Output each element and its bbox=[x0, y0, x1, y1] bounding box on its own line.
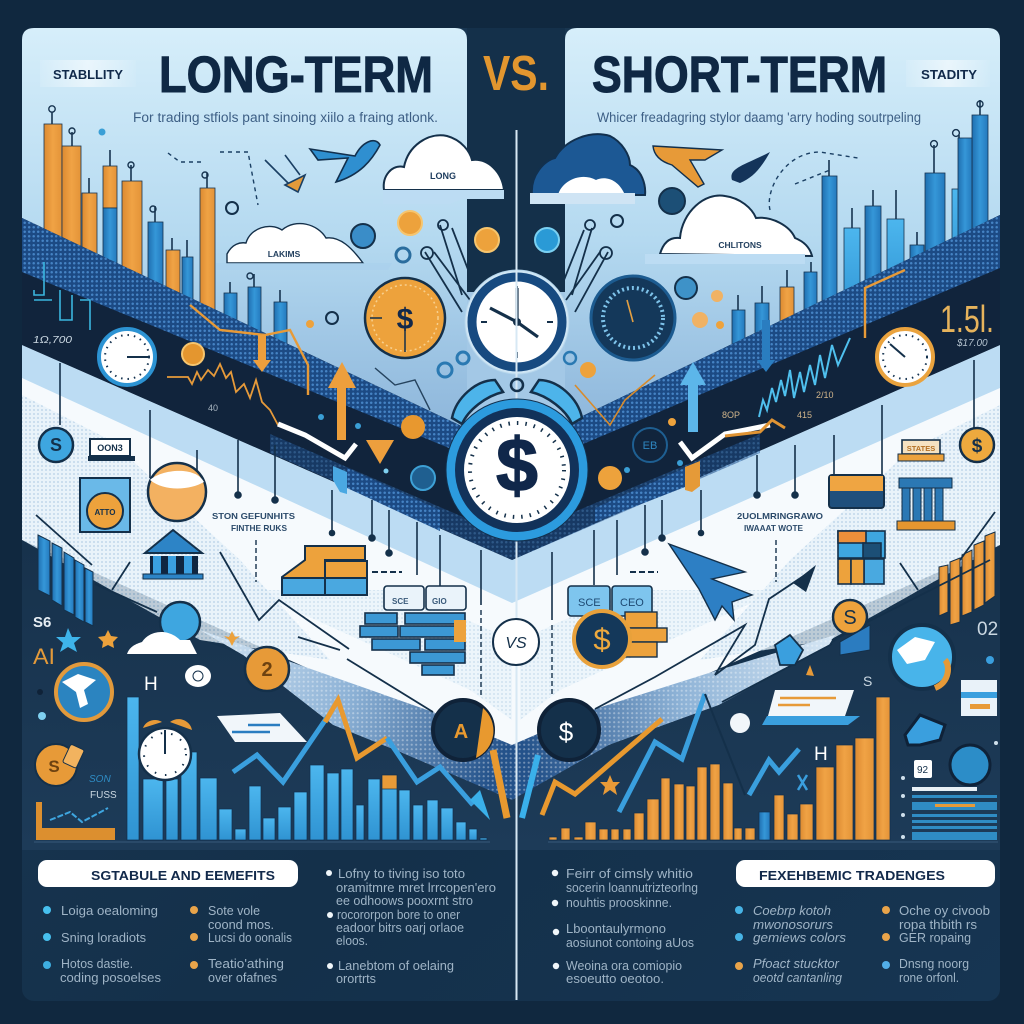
bullets column four: Feirr of cimsly whitio bbox=[566, 866, 693, 881]
icon: dollar coin gauge bbox=[365, 278, 445, 358]
pale halftone band left bbox=[22, 395, 330, 660]
chart: long-term candlesticks bbox=[44, 106, 287, 357]
bullets column four: aosiunot contoing aUos bbox=[566, 935, 694, 950]
icon: right pillars bbox=[897, 478, 955, 530]
label: right band numbers bbox=[722, 390, 834, 420]
text: right middle: IWAAAT WOTE bbox=[744, 523, 803, 533]
icon: blue stacks: GIO bbox=[432, 597, 447, 606]
panel: lower dark left bbox=[22, 540, 512, 850]
pale halftone centre left bbox=[250, 590, 512, 720]
halftone band right bbox=[512, 215, 1000, 474]
trend: left dark lines bbox=[95, 552, 433, 712]
subtitle left: For trading stfiols pant sinoing xiilo a fraing atlonk. bbox=[133, 110, 438, 125]
icon: left sign bbox=[88, 439, 135, 461]
icon: shield bbox=[775, 635, 803, 665]
bullets column five: Coebrp kotoh bbox=[753, 903, 831, 918]
icon: right coin bbox=[960, 428, 994, 462]
icon: VS badge bbox=[493, 619, 539, 665]
pale halftone band right bbox=[700, 405, 1000, 660]
text: left middle: STON GEFUNHITS bbox=[212, 511, 295, 521]
bullets column five bbox=[735, 903, 847, 985]
icon: right card bbox=[829, 475, 884, 508]
icon: left dollar circle bbox=[39, 428, 73, 462]
icon: right magnifier bbox=[522, 700, 599, 818]
icon: hat bbox=[905, 715, 945, 745]
bullets column six bbox=[882, 903, 990, 985]
bullets column two: coond mos. bbox=[208, 917, 274, 932]
label: son fuss: SON bbox=[89, 774, 111, 785]
bullets column two: Sote vole bbox=[208, 903, 260, 918]
bullets column one: Loiga oealoming bbox=[61, 903, 158, 918]
tag: stability right bbox=[906, 60, 990, 87]
bullets column three: Lofny to tiving iso toto bbox=[338, 866, 465, 881]
bullets column five: oeotd cantanling bbox=[753, 970, 843, 985]
bullets column two bbox=[190, 903, 292, 985]
icon: top clock bbox=[465, 270, 569, 374]
chart: right stacked rows bbox=[912, 787, 997, 840]
icon: orange plane bbox=[653, 146, 722, 187]
text: left middle bbox=[212, 511, 295, 533]
chart: right slanted bars bbox=[939, 532, 995, 625]
icon: box stack bbox=[282, 546, 367, 595]
bullets column two: Teatio'athing bbox=[208, 956, 284, 971]
icon: cloud lakims bbox=[216, 224, 392, 270]
tag: stability left: STABLLITY bbox=[53, 68, 124, 82]
halftone strip lower right bright bbox=[595, 468, 685, 522]
bullets column four: Weoina ora comiopio bbox=[566, 958, 682, 973]
label: right band numbers: 8OP bbox=[722, 410, 740, 420]
halftone ribbon lower left bbox=[200, 630, 512, 800]
hooks right bbox=[562, 220, 612, 312]
dollar coin bbox=[574, 611, 630, 667]
icon: target bbox=[185, 665, 211, 687]
bullets column six: rone orfonl. bbox=[899, 970, 959, 985]
icon: orange bag bbox=[35, 744, 84, 786]
halftone strip lower left bbox=[270, 434, 512, 560]
icon: orange coin low bbox=[245, 647, 289, 691]
icon: right swoosh bbox=[731, 152, 770, 183]
bullets column six: ropa thbith rs bbox=[899, 917, 978, 932]
icon: VS badge: VS bbox=[505, 635, 527, 652]
line chart vines left bbox=[375, 368, 430, 410]
chart: long-term bars bbox=[127, 697, 487, 840]
icon: left dollar circle: S bbox=[50, 435, 62, 455]
icon: paper plane bbox=[669, 544, 752, 620]
title: versus: VS. bbox=[483, 47, 549, 101]
icon: piggy bbox=[950, 745, 990, 785]
icon: coin stack dollar bbox=[568, 586, 667, 667]
bullets column six: GER ropaing bbox=[899, 930, 971, 945]
icon: blue stacks: SCE bbox=[392, 597, 409, 606]
alarm knob bbox=[511, 379, 523, 391]
icon: ring EB bbox=[633, 428, 667, 462]
icon: right note bbox=[762, 690, 860, 725]
connector lines left bbox=[60, 363, 481, 605]
clock body bbox=[446, 399, 588, 541]
bullets column three: ee odhoows pooxrnt stro bbox=[336, 893, 473, 908]
panel: benefits left bbox=[38, 860, 496, 986]
centre strip of title row bbox=[467, 28, 565, 292]
bullets column five: mwonosorurs bbox=[753, 917, 834, 932]
icon: colour block bbox=[838, 531, 885, 584]
arrow: orange up bbox=[328, 362, 356, 440]
arrow: orange down small bbox=[366, 440, 394, 464]
trend: right dark rising bbox=[595, 560, 990, 709]
text: left middle: FINTHE RUKS bbox=[231, 523, 287, 533]
icon: left magnifier: A bbox=[454, 721, 468, 743]
flight path left bbox=[168, 152, 258, 205]
icon: orange bag: S bbox=[48, 757, 60, 776]
icon: left alarm clock bbox=[139, 719, 192, 780]
tag: 92 bbox=[914, 760, 932, 778]
bullets column four bbox=[552, 866, 698, 986]
pill heading right bbox=[736, 860, 995, 887]
blue tab on band bbox=[333, 466, 347, 494]
centre vertical line bbox=[516, 130, 518, 1000]
bullets column five: gemiews colors bbox=[753, 930, 847, 945]
label: S6: S6 bbox=[33, 614, 51, 631]
dash connector bbox=[372, 571, 658, 573]
icon: blue box right bbox=[840, 625, 870, 655]
pill heading left: SGTABULE AND EEMEFITS bbox=[91, 868, 275, 883]
icon: left swoosh bbox=[265, 155, 305, 192]
bullets column one: Sning loradiots bbox=[61, 930, 146, 945]
bullets column three: Lanebtom of oelaing bbox=[338, 958, 454, 973]
icon: coin stack dollar: CEO bbox=[620, 597, 644, 609]
panel: traits right bbox=[552, 860, 995, 986]
bullets column four: nouhtis prooskinne. bbox=[566, 895, 672, 910]
bullets column two: over ofafnes bbox=[208, 970, 277, 985]
squiggle chart left bbox=[167, 364, 278, 425]
icon: mini chart bottom left bbox=[36, 802, 115, 840]
chart: left slanted bars bbox=[38, 535, 93, 626]
icon: cloud long bbox=[383, 135, 504, 204]
halftone strip lower right bbox=[512, 434, 760, 560]
pale blue stripe bbox=[22, 345, 1000, 603]
halftone band left bbox=[22, 218, 512, 474]
label: 1.5l: 1.5l. bbox=[940, 299, 994, 341]
label: son fuss: FUSS bbox=[90, 790, 117, 801]
icon: right magnifier: $ bbox=[559, 717, 574, 747]
check mark right bbox=[680, 425, 770, 458]
bullets column one: coding posoelses bbox=[60, 970, 161, 985]
text: right middle bbox=[737, 511, 823, 533]
icons: small stars right bbox=[600, 665, 814, 795]
icon: left picture card bbox=[80, 478, 130, 532]
bullets column three: eadoor bitrs oarj orlaoe bbox=[336, 920, 464, 935]
label: H right: H bbox=[814, 744, 828, 765]
label: 02: 02 bbox=[977, 619, 998, 640]
panel: short-term sky bbox=[512, 28, 1000, 500]
arrow: left bars bbox=[36, 515, 130, 590]
alarm bells bbox=[452, 380, 582, 424]
title: short-term: SHORT-TERM bbox=[592, 46, 887, 103]
squiggle chart right bbox=[759, 338, 850, 417]
bullets column five: Pfoact stucktor bbox=[753, 956, 840, 971]
icon: right sign: STATES bbox=[907, 444, 935, 453]
icon: right globe bbox=[890, 625, 954, 689]
hooks left bbox=[421, 220, 474, 312]
tag: stability left bbox=[40, 60, 136, 87]
icon: left note bbox=[217, 713, 307, 742]
connector lines right bbox=[552, 360, 974, 620]
panel: long-term sky bbox=[22, 28, 512, 500]
icon: blue coin bbox=[160, 602, 200, 642]
bullets column three: oramitmre mret lrrcopen'ero bbox=[336, 880, 496, 895]
tag: stability right: STADITY bbox=[921, 68, 978, 82]
label: son fuss bbox=[89, 774, 117, 801]
icon: cloud lakims: LAKIMS bbox=[268, 249, 301, 259]
icon: coin stack dollar: SCE bbox=[578, 597, 601, 609]
orange tab on band bbox=[685, 461, 700, 492]
icon: cloud long: LONG bbox=[430, 171, 456, 181]
icon: cloud low bbox=[127, 632, 197, 654]
icon: orange coin right: S bbox=[843, 607, 857, 629]
chart: short-term candlesticks bbox=[732, 100, 988, 355]
icon: coins in lower band bbox=[318, 414, 683, 490]
bullets column four: esoeutto oeotoo. bbox=[566, 971, 664, 986]
header tags bbox=[568, 586, 652, 616]
icon: alarm clock with dollar bbox=[446, 379, 588, 541]
icon: dark cloud bbox=[530, 134, 645, 204]
tag: 92: 92 bbox=[917, 765, 929, 776]
bullets column six: Dnsng noorg bbox=[899, 956, 969, 971]
icon: coin stack dollar: $ bbox=[593, 622, 611, 657]
check mark left bbox=[278, 424, 356, 458]
icon: ring EB: EB bbox=[643, 440, 657, 452]
arrowhead bbox=[793, 565, 816, 592]
halftone ribbon lower right bbox=[512, 635, 835, 800]
bullets column two: Lucsi do oonalis bbox=[208, 930, 292, 945]
icon: stars bbox=[56, 628, 240, 652]
arrow: right bars bbox=[900, 512, 995, 590]
label: AI: AI bbox=[33, 644, 55, 669]
halftone strip lower left bright bbox=[347, 468, 440, 531]
bullets column three bbox=[326, 866, 496, 986]
icon: right coin: $ bbox=[972, 436, 983, 457]
bullets column four: socerin loannutrizteorlng bbox=[566, 880, 698, 895]
panel: centre lower sky bbox=[467, 290, 565, 490]
orange trend on left band bbox=[190, 305, 308, 395]
small coins and rings upper bbox=[98, 128, 724, 378]
icon: left globe bbox=[56, 664, 112, 720]
pill heading right: FEXEHBEMIC TRADENGES bbox=[759, 868, 945, 883]
arrow: orange down left bbox=[253, 335, 271, 372]
chart: short-term bars bbox=[549, 697, 890, 840]
icon: bank bbox=[143, 530, 203, 579]
arrow: blue down bbox=[757, 320, 775, 372]
bullets column one bbox=[43, 903, 161, 985]
title: long-term: LONG-TERM bbox=[159, 46, 433, 103]
icon: cloud chlitons bbox=[645, 195, 812, 264]
line chart vines right bbox=[575, 375, 655, 425]
icon: cloud chlitons: CHLITONS bbox=[718, 240, 762, 250]
label: S: S bbox=[863, 673, 872, 689]
icon: right sign bbox=[898, 440, 944, 461]
icon: blue plane bbox=[310, 141, 380, 182]
pale halftone centre right bbox=[520, 590, 780, 720]
trend: long-term zigzag bbox=[233, 700, 473, 805]
label: right band numbers: 415 bbox=[797, 410, 812, 420]
bullets column six: Oche oy civoob bbox=[899, 903, 990, 918]
label: right band numbers: 2/10 bbox=[816, 390, 834, 400]
pill heading left bbox=[38, 860, 298, 887]
divider: chart baseline bbox=[34, 841, 998, 843]
icon: left sign: OON3 bbox=[97, 443, 123, 453]
trend: short-term zigzag bbox=[542, 694, 799, 815]
orange line right low bbox=[725, 420, 785, 436]
icon: small gold coin left band bbox=[182, 343, 204, 365]
dashed separators bbox=[256, 540, 776, 696]
bullets column four: Lboontaulyrmono bbox=[566, 921, 666, 936]
icon: right legend block bbox=[961, 680, 997, 716]
arrow: blue up bbox=[680, 362, 706, 432]
subtitle right: Whicer freadagring stylor daamg 'arry hoding soutrpeling bbox=[597, 110, 921, 125]
icon: scatter dots bbox=[37, 656, 998, 839]
orange line on right band bbox=[865, 270, 905, 338]
gold bars bbox=[625, 612, 667, 657]
label: H: H bbox=[144, 674, 158, 695]
bullets column one: Hotos dastie. bbox=[61, 956, 133, 971]
panel: lower dark right bbox=[512, 545, 1000, 850]
icon: orange face coin bbox=[148, 463, 206, 521]
bullets column three: rocororpon bore to oner bbox=[337, 907, 461, 922]
icon: dark gauge bbox=[591, 276, 675, 360]
icon: right gauge bbox=[877, 329, 933, 385]
bullets column three: eloos. bbox=[336, 933, 368, 948]
icon: left gauge bbox=[99, 329, 155, 385]
icon: blue stacks bbox=[360, 586, 466, 675]
label: 40: 40 bbox=[208, 403, 218, 413]
label: left chart strokes bbox=[34, 262, 90, 330]
dark V band bbox=[22, 215, 1000, 560]
label: right value: $17.00 bbox=[956, 338, 988, 349]
panel: white middle zone bbox=[22, 345, 1000, 760]
flight path right bbox=[769, 152, 858, 210]
text: right middle: 2UOLMRINGRAWO bbox=[737, 511, 823, 521]
label: left value: 1Ω,700 bbox=[33, 335, 73, 346]
icon: left picture card: ATTO bbox=[94, 508, 116, 517]
dollar sign: $ bbox=[496, 423, 538, 507]
icon: dollar coin gauge: $ bbox=[397, 303, 414, 336]
icon: orange coin low: 2 bbox=[261, 659, 273, 681]
icon: left magnifier bbox=[433, 700, 507, 820]
icon: orange coin right bbox=[833, 600, 867, 634]
bullets column three: orortrts bbox=[336, 971, 376, 986]
